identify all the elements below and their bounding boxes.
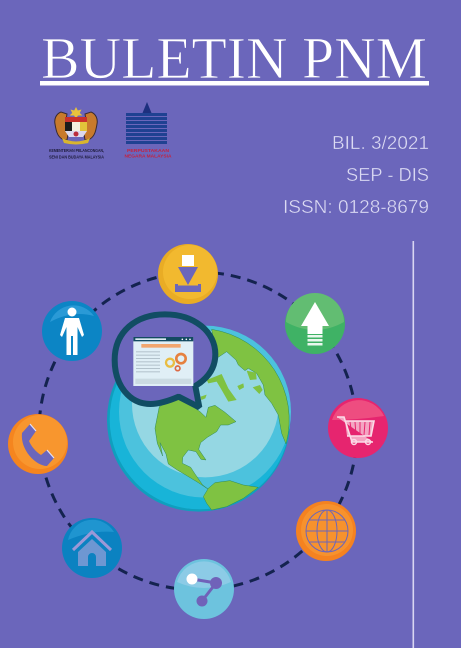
web window bbox=[133, 337, 193, 386]
speech bubble bbox=[115, 314, 215, 407]
land: South America bbox=[203, 481, 258, 510]
icon: person bbox=[42, 301, 102, 361]
logo: ministry coat of arms: KEMENTERIAN PELANCONGAN, bbox=[49, 148, 104, 153]
issue details: ISSN: 0128-8679 bbox=[283, 197, 429, 217]
logo: national library: NEGARA MALAYSIA bbox=[124, 154, 172, 158]
icon: shopping cart bbox=[328, 398, 388, 458]
vertical rule bbox=[412, 241, 414, 648]
logo: national library: PERPUSTAKAAN bbox=[127, 148, 170, 153]
globe illustration bbox=[107, 326, 291, 512]
issue details: SEP - DIS bbox=[346, 165, 429, 185]
land: islands bbox=[201, 371, 263, 402]
icon: globe bbox=[296, 501, 356, 561]
land: North America bbox=[155, 397, 236, 490]
logo: national library bbox=[124, 102, 172, 158]
icon: telephone bbox=[8, 414, 68, 474]
logo: ministry coat of arms bbox=[49, 107, 104, 160]
icon: download bbox=[158, 244, 218, 304]
icon: upload arrow bbox=[285, 293, 345, 354]
icon: share bbox=[174, 559, 234, 619]
issue details: BIL. 3/2021 bbox=[332, 133, 429, 153]
title: BULETIN PNM bbox=[41, 25, 427, 91]
issue details bbox=[283, 133, 429, 217]
logo: ministry coat of arms: SENI DAN BUDAYA MALAYSIA bbox=[49, 154, 104, 160]
land: northern rim bbox=[212, 329, 289, 444]
dashed ring bbox=[39, 272, 357, 590]
icon: house bbox=[62, 518, 122, 578]
